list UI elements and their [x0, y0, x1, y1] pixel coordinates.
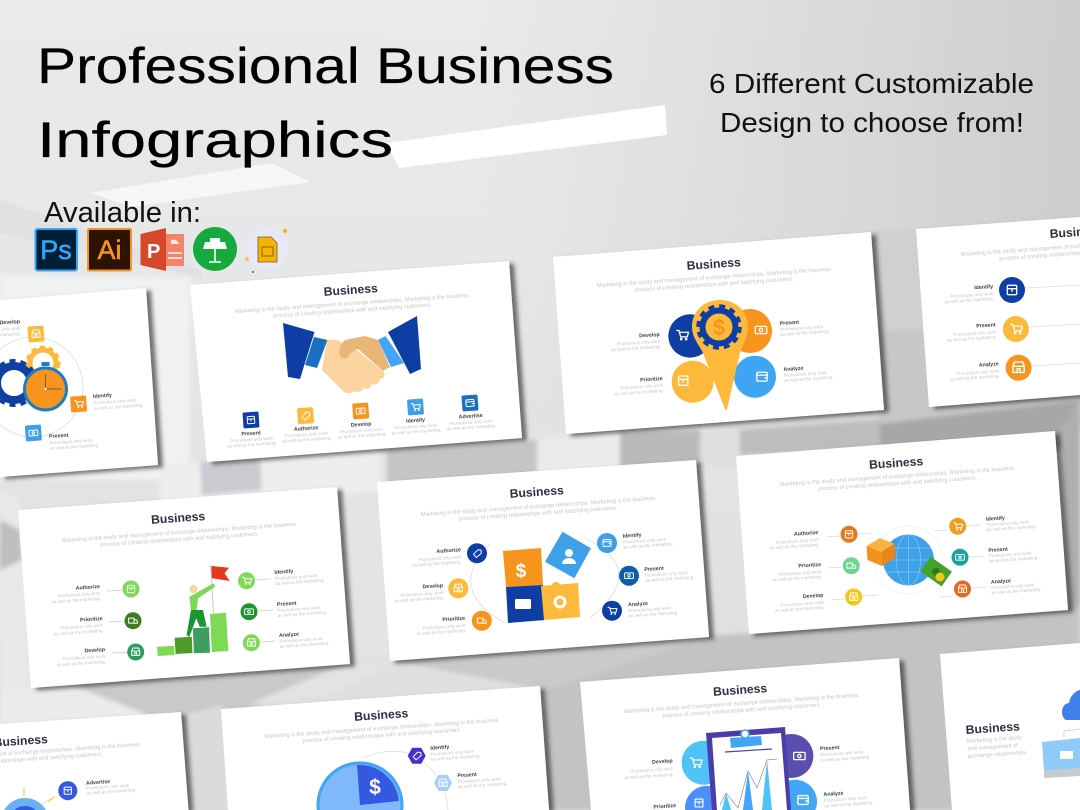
- label: identify: [274, 567, 325, 586]
- panel: slide cloud: [940, 643, 1080, 810]
- icon: yellow gear: [27, 347, 59, 379]
- icon: monitor: [1042, 729, 1080, 778]
- label: analyze: [991, 576, 1041, 595]
- label: prioritize: Prioritize: [80, 616, 103, 624]
- label: analyze: Analyze: [279, 632, 299, 639]
- heading: Business: [151, 509, 206, 527]
- location pin with gear: [692, 300, 748, 410]
- label: analyze: [823, 789, 874, 808]
- label: present: [49, 431, 99, 451]
- label: authorize: [411, 547, 463, 568]
- panel: slide bottom left: [0, 712, 189, 810]
- label: identify: Identify: [430, 744, 450, 752]
- heading: Business: [713, 681, 768, 699]
- icon: blue gear: [0, 361, 36, 405]
- label: authorize: as well as the marketing.: [769, 542, 819, 550]
- label: present: Present: [49, 433, 69, 440]
- icon: develop: [352, 402, 369, 420]
- description: Marketing is the study and management of exchange relationships. Marketing is the business: [62, 522, 296, 544]
- label: advertise: [446, 412, 496, 431]
- label: prioritize: Promotions only work: [620, 382, 664, 390]
- label: present: [277, 599, 327, 618]
- panel: slide handshake: [190, 261, 522, 462]
- label: present: as well as the marketing.: [227, 440, 277, 449]
- label: present: as well as the marketing.: [458, 781, 508, 789]
- title: Professional Business: [37, 38, 614, 94]
- label: prioritize: Promotions only work: [60, 622, 104, 630]
- label: present: Present: [457, 772, 477, 779]
- label: present: [988, 545, 1039, 563]
- icon: develop: [845, 588, 862, 606]
- label: identify: Identify: [622, 532, 642, 540]
- label: present: [457, 770, 508, 789]
- globe: [874, 526, 942, 594]
- label: present: Present: [644, 566, 664, 573]
- label: advertise: Promotions only work: [86, 783, 130, 791]
- label: identify: [622, 530, 673, 550]
- label: identify: Promotions only work: [950, 291, 994, 299]
- available in label: Available in:: [44, 197, 201, 229]
- pie chart: [317, 761, 404, 810]
- arrows: [107, 579, 275, 653]
- label: identify: [943, 284, 995, 304]
- label: authorize: Authorize: [794, 530, 819, 538]
- ceiling light: large panel: [386, 105, 667, 168]
- label: identify: as well as the marketing.: [391, 427, 441, 436]
- title: [37, 38, 614, 168]
- label: present: Present: [988, 547, 1008, 554]
- label: prioritize: [771, 562, 823, 582]
- label: present: Promotions only work: [277, 605, 321, 613]
- label: present: [644, 564, 695, 583]
- icon: develop: [127, 644, 144, 660]
- label: present: [226, 429, 277, 449]
- label: authorize: Promotions only work: [285, 430, 329, 438]
- icon: present: [434, 775, 452, 791]
- label: prioritize: Prioritize: [798, 562, 821, 570]
- label: analyze: Promotions only work: [784, 370, 828, 378]
- location pin with gear: $: [713, 315, 725, 340]
- label: analyze: as well as the marketing.: [824, 800, 874, 808]
- label: authorize: Authorize: [436, 547, 461, 555]
- label: prioritize: as well as the marketing.: [614, 388, 664, 396]
- icon: advertise: [58, 781, 77, 800]
- icon: identify: [238, 572, 255, 589]
- heading: Business: [869, 454, 924, 472]
- label: develop: Promotions only work: [62, 653, 106, 661]
- money with coin: [920, 557, 952, 586]
- label: develop: Develop: [422, 583, 444, 590]
- heading: Business: [323, 281, 378, 299]
- description: process of creating relationships with and satisfying customers.: [818, 475, 977, 493]
- icon: Photoshop: [36, 229, 77, 270]
- icon: Illustrator: [88, 229, 131, 270]
- icon: authorize: [840, 526, 858, 543]
- description: Marketing is the study and management of exchange relationships. Marketing is the business: [780, 466, 1014, 488]
- label: analyze: Promotions only work: [824, 795, 868, 803]
- label: present: Promotions only work: [989, 550, 1033, 558]
- petal: prioritize: [672, 361, 714, 403]
- heading: Business: [354, 706, 409, 724]
- label: develop: [55, 647, 107, 667]
- label: develop: Develop: [351, 421, 372, 429]
- icon: develop: [448, 578, 468, 598]
- flag: [211, 565, 230, 613]
- label: authorize: [50, 584, 102, 604]
- label: identify: as well as the marketing.: [275, 578, 325, 586]
- label: identify: as well as the marketing.: [94, 403, 143, 411]
- icon: cloud: [1062, 690, 1080, 720]
- icon: identify: [597, 533, 617, 553]
- description: and management of: [967, 743, 1019, 752]
- label: develop: Promotions only work: [781, 600, 825, 608]
- petal: develop: [682, 741, 726, 785]
- description: Marketing is the study and management of exchange relationships. Marketing is the business: [235, 293, 469, 315]
- icon: identify: [949, 518, 966, 535]
- ring arcs: [471, 538, 619, 623]
- label: develop: [623, 758, 675, 780]
- label: identify: Identify: [406, 417, 425, 425]
- label: prioritize: as well as the marketing.: [54, 628, 104, 636]
- description: process of creating relationships with and satisfying customers.: [459, 505, 618, 523]
- petal: present: [769, 734, 813, 778]
- icon: identify: [999, 277, 1025, 303]
- icon: prioritize: [472, 611, 492, 631]
- icon: identify: [407, 398, 424, 416]
- icon: cash: [25, 424, 42, 442]
- description: process of creating relationships with and satisfying customers.: [100, 531, 259, 549]
- label: present: [779, 318, 830, 337]
- subtitle: [709, 68, 1034, 138]
- climbing person: [187, 583, 215, 637]
- label: develop: Develop: [639, 332, 661, 339]
- petal: develop: [668, 314, 712, 358]
- label: identify: [430, 742, 481, 762]
- description: process of creating relationships with and satisfying customers.: [273, 302, 432, 320]
- label: develop: [336, 420, 387, 440]
- label: analyze: Analyze: [628, 601, 648, 608]
- label: authorize: Authorize: [75, 584, 100, 592]
- description: process of creating relationships with and satisfying customers.: [302, 727, 462, 745]
- label: identify: Promotions only work: [623, 537, 667, 545]
- label: present: as well as the marketing.: [50, 443, 99, 451]
- petal: prioritize: [685, 786, 729, 810]
- label: develop: [0, 319, 22, 339]
- label: analyze: Promotions only work: [628, 605, 672, 613]
- subtitle: 6 Different Customizable: [709, 68, 1034, 99]
- puzzle pieces: $: [516, 561, 527, 582]
- heading: Business: [686, 255, 741, 273]
- label: present: Promotions only work: [645, 570, 689, 578]
- label: develop: Develop: [652, 758, 674, 766]
- icon: advertise: [461, 394, 479, 412]
- label: develop: Develop: [803, 593, 824, 600]
- label: present: as well as the marketing.: [780, 329, 830, 337]
- label: advertise: as well as the marketing.: [447, 423, 496, 431]
- label: present: Present: [976, 322, 996, 330]
- label: analyze: as well as the marketing.: [784, 375, 834, 383]
- connector lines: [1025, 285, 1080, 366]
- label: present: as well as the marketing.: [821, 754, 870, 763]
- label: analyze: as well as the marketing.: [629, 610, 678, 618]
- label: identify: [986, 513, 1036, 532]
- icon: authorize: [122, 580, 140, 598]
- icon: stopwatch: [24, 362, 66, 410]
- description: Marketing is the study and management of exchange relationships. Marketing is the business: [421, 496, 655, 518]
- connector arc: [38, 795, 60, 808]
- petal: analyze: [734, 356, 776, 398]
- label: authorize: Authorize: [294, 425, 319, 433]
- label: identify: [93, 391, 143, 411]
- label: present: as well as the marketing.: [947, 334, 997, 343]
- label: prioritize: [613, 376, 664, 396]
- label: develop: Develop: [84, 647, 106, 654]
- label: analyze: Analyze: [991, 578, 1011, 586]
- label: prioritize: Promotions only work: [778, 569, 822, 577]
- icon: Illustrator: Ai: [97, 235, 122, 265]
- label: develop: as well as the marketing.: [337, 431, 387, 440]
- icon: analyze: [243, 634, 260, 651]
- icon: present: [240, 603, 258, 620]
- label: present: as well as the marketing.: [278, 610, 327, 618]
- label: present: Promotions only work: [230, 435, 274, 443]
- label: identify: Promotions only work: [431, 749, 475, 757]
- icon: prioritize: [843, 557, 860, 574]
- label: present: Promotions only work: [820, 749, 864, 757]
- label: develop: [774, 593, 825, 613]
- icon: present: [619, 566, 639, 586]
- label: analyze: [949, 361, 1000, 382]
- label: advertise: Advertise: [86, 779, 110, 787]
- label: identify: as well as the marketing.: [987, 524, 1036, 532]
- panel: slide puzzle: [377, 460, 709, 661]
- icon: present: [1003, 316, 1029, 342]
- description: Marketing is the study and management of exchange relationships. Marketing is the business: [597, 267, 831, 289]
- label: identify: Promotions only work: [275, 573, 319, 581]
- title: Infographics: [37, 112, 393, 168]
- label: develop: Promotions only work: [400, 590, 444, 598]
- label: analyze: Promotions only work: [279, 636, 323, 644]
- icon: analyze: [954, 580, 971, 598]
- label: analyze: as well as the marketing.: [950, 373, 1000, 382]
- label: identify: Promotions only work: [93, 397, 137, 405]
- label: develop: Promotions only work: [340, 426, 384, 434]
- label: analyze: [628, 599, 678, 618]
- panel: slide location pin: [553, 232, 884, 434]
- label: authorize: as well as the marketing.: [412, 559, 462, 568]
- icon: present: [952, 549, 968, 566]
- label: analyze: Analyze: [823, 791, 844, 798]
- panel: slide growth bars: [18, 487, 350, 688]
- label: authorize: as well as the marketing.: [51, 596, 101, 604]
- icon: analyze: [1006, 355, 1032, 381]
- icon: identify: [408, 748, 426, 764]
- icon: store: [27, 325, 45, 343]
- label: authorize: Promotions only work: [776, 537, 820, 545]
- panel: slide timeline right: [916, 217, 1080, 407]
- label: identify: as well as the marketing.: [431, 753, 481, 762]
- icon: Google Slides: [245, 228, 288, 273]
- heading: Business: [509, 483, 564, 501]
- label: present: Promotions only work: [780, 324, 824, 332]
- panel: slide globe: [736, 431, 1068, 634]
- label: present: as well as the marketing.: [989, 555, 1039, 563]
- subtitle: Design to choose from!: [720, 107, 1024, 138]
- label: develop: [610, 332, 662, 352]
- description: Marketing is the study and management of exchange relationships. Marketing is the business: [264, 718, 499, 740]
- label: identify: as well as the marketing.: [944, 296, 994, 304]
- icon: authorize: [467, 543, 487, 563]
- label: develop: as well as the marketing.: [394, 595, 444, 603]
- description: process of creating relationships with and satisfying customers.: [635, 276, 794, 294]
- label: present: Present: [820, 745, 840, 752]
- label: identify: Promotions only work: [986, 519, 1030, 527]
- label: identify: Identify: [93, 393, 112, 400]
- label: develop: as well as the marketing.: [775, 605, 824, 613]
- icon: present: [242, 411, 260, 429]
- description: Marketing is the study: [967, 735, 1022, 745]
- label: identify: [391, 416, 441, 436]
- label: present: Present: [241, 430, 261, 438]
- puzzle pieces: [503, 532, 591, 623]
- icon: cart: [70, 395, 87, 413]
- label: advertise: Advertise: [459, 413, 483, 421]
- label: prioritize: Prioritize: [640, 376, 663, 384]
- clipboard with line chart: [706, 727, 791, 810]
- label: develop: Promotions only work: [617, 338, 661, 346]
- label: analyze: [279, 630, 329, 649]
- icon: PowerPoint: P: [147, 241, 160, 263]
- label: present: [946, 322, 997, 343]
- label: present: [820, 743, 870, 763]
- label: present: Promotions only work: [49, 437, 93, 445]
- label: develop: as well as the marketing.: [624, 772, 674, 780]
- petal: analyze: [773, 780, 817, 810]
- ceiling light: small panel: [90, 163, 310, 207]
- label: prioritize: as well as the marketing.: [772, 574, 822, 582]
- label: analyze: Analyze: [783, 366, 804, 373]
- icon: prioritize: [124, 612, 142, 629]
- bar chart steps: [157, 613, 228, 656]
- description: [967, 735, 1028, 760]
- label: present: Present: [277, 601, 297, 608]
- label: authorize: Promotions only work: [57, 590, 101, 598]
- label: develop: [393, 583, 445, 603]
- ring: [0, 337, 83, 437]
- label: present: Present: [779, 320, 799, 327]
- label: present: Promotions only work: [458, 776, 502, 784]
- label: authorize: as well as the marketing.: [282, 435, 332, 444]
- pie chart: $: [369, 776, 381, 799]
- label: identify: as well as the marketing.: [623, 541, 673, 550]
- label: present: as well as the marketing.: [645, 575, 695, 583]
- label: authorize: [769, 530, 820, 550]
- label: present: Promotions only work: [953, 329, 997, 337]
- label: identify: Promotions only work: [394, 422, 438, 430]
- label: advertise: as well as the marketing.: [87, 787, 136, 796]
- label: analyze: as well as the marketing.: [280, 641, 329, 649]
- description: Marketing is the study and management of exchange relationships. Marketing is the business: [624, 693, 859, 715]
- icon: Keynote: [193, 227, 237, 271]
- panel: slide pie: [221, 686, 549, 810]
- handshake illustration: [283, 316, 421, 393]
- description: exchange relationships.: [968, 750, 1028, 760]
- label: develop: as well as the marketing.: [56, 659, 106, 667]
- label: identify: Identify: [274, 569, 294, 576]
- label: analyze: Promotions only work: [991, 582, 1035, 590]
- label: authorize: [281, 424, 332, 444]
- heading: Business: [965, 719, 1020, 737]
- label: authorize: Promotions only work: [418, 554, 462, 562]
- label: advertise: [86, 777, 136, 796]
- label: analyze: as well as the marketing.: [991, 587, 1041, 595]
- icon: analyze: [602, 601, 622, 621]
- label: prioritize: [415, 616, 467, 636]
- label: prioritize: Prioritize: [442, 616, 465, 623]
- panel: slide clock: [0, 288, 158, 477]
- description: process of creating relationships with and satisfying customers.: [662, 702, 822, 720]
- icon: Photoshop: Ps: [40, 235, 72, 265]
- ring arc: [363, 751, 448, 810]
- label: analyze: [783, 364, 834, 383]
- label: develop: Promotions only work: [630, 766, 674, 774]
- icon: PowerPoint: [140, 228, 184, 271]
- label: identify: Identify: [974, 284, 993, 291]
- label: prioritize: as well as the marketing.: [416, 628, 466, 636]
- label: develop: as well as the marketing.: [611, 344, 661, 352]
- label: prioritize: Promotions only work: [422, 623, 466, 631]
- label: prioritize: [53, 616, 104, 636]
- panel: slide clipboard: [580, 658, 910, 810]
- label: identify: Identify: [986, 515, 1005, 523]
- connector lines: [826, 525, 986, 600]
- label: analyze: Analyze: [979, 361, 999, 369]
- icon: authorize: [297, 407, 314, 424]
- package box: [866, 537, 896, 567]
- ceiling vent: [0, 200, 203, 278]
- label: advertise: Promotions only work: [450, 418, 494, 426]
- petal: present: [728, 309, 772, 353]
- label: analyze: Promotions only work: [956, 368, 1000, 376]
- radiating blue circle: [4, 788, 54, 810]
